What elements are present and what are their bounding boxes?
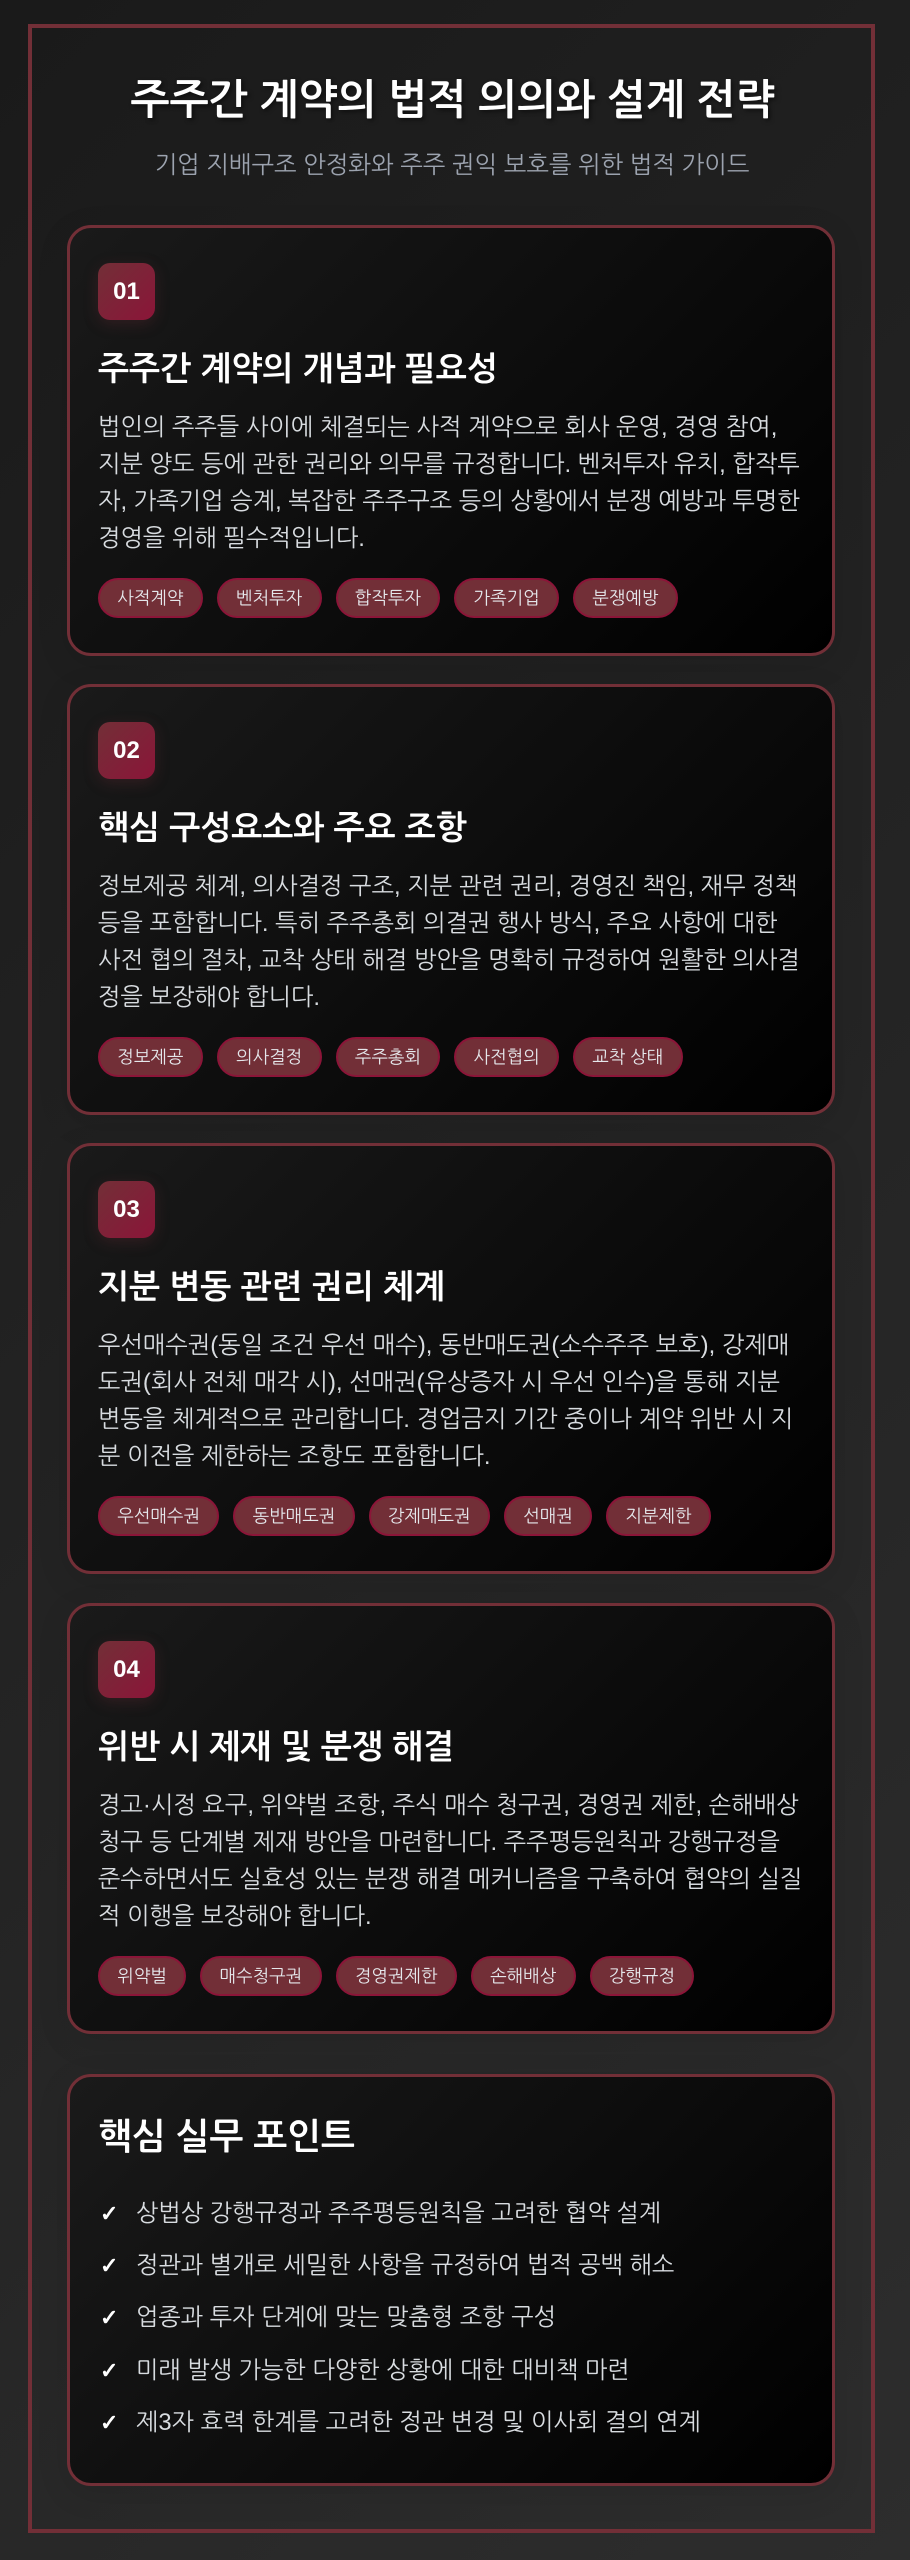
body text 04: 준수하면서도 실효성 있는 분쟁 해결 메커니즘을 구축하여 협약의 실질 [98, 1866, 802, 1892]
tags 03: 동반매도권 [253, 1506, 335, 1526]
badge 03: 03 [113, 1196, 140, 1223]
badge 04 [98, 1640, 155, 1698]
panel: section 02 [67, 684, 835, 1115]
point 3: ✓ [100, 2305, 118, 2330]
body text 02: 등을 포함합니다. 특히 주주총회 의결권 행사 방식, 주요 사항에 대한 [98, 910, 777, 937]
badge 01 [98, 263, 155, 320]
heading 04: 위반 시 제재 및 분쟁 해결 [98, 1728, 454, 1764]
point 1: 상법상 강행규정과 주주평등원칙을 고려한 협약 설계 [136, 2200, 661, 2227]
tags 02: 의사결정 [236, 1047, 302, 1067]
tags 04: 경영권제한 [355, 1966, 438, 1986]
body text 01: 경영을 위해 필수적입니다. [98, 525, 365, 552]
panel: section 03 [67, 1143, 835, 1574]
body text 03 [98, 1332, 793, 1470]
body text 02: 사전 협의 절차, 교착 상태 해결 방안을 명확히 규정하여 원활한 의사결 [98, 947, 800, 974]
body text 01: 자, 가족기업 승계, 복잡한 주주구조 등의 상황에서 분쟁 예방과 투명한 [98, 488, 800, 515]
tags 01: 사적계약 [117, 588, 183, 608]
badge 04: 04 [113, 1656, 140, 1682]
body text 03: 변동을 체계적으로 관리합니다. 경업금지 기간 중이나 계약 위반 시 지 [98, 1406, 793, 1433]
body text 01: 지분 양도 등에 관한 권리와 의무를 규정합니다. 벤처투자 유치, 합작투 [98, 451, 800, 478]
tags 04 [98, 1956, 694, 1996]
tags 04: 강행규정 [609, 1966, 675, 1986]
tags 04: 매수청구권 [220, 1966, 302, 1986]
tags 01: 벤처투자 [236, 588, 302, 608]
subtitle: 기업 지배구조 안정화와 주주 권익 보호를 위한 법적 가이드 [155, 152, 749, 179]
tags 02: 주주총회 [355, 1047, 421, 1067]
tags 03: 우선매수권 [117, 1506, 200, 1526]
body text 02: 정보제공 체계, 의사결정 구조, 지분 관련 권리, 경영진 책임, 재무 정책 [98, 873, 797, 900]
body text 03: 우선매수권(동일 조건 우선 매수), 동반매도권(소수주주 보호), 강제매 [98, 1332, 789, 1359]
body text 03: 도권(회사 전체 매각 시), 선매권(유상증자 시 우선 인수)을 통해 지분 [98, 1369, 780, 1396]
body text 01: 법인의 주주들 사이에 체결되는 사적 계약으로 회사 운영, 경영 참여, [98, 414, 777, 441]
body text 04 [98, 1792, 802, 1930]
point 5: ✓ [100, 2410, 118, 2435]
tags 04: 손해배상 [490, 1966, 556, 1986]
point 2: 정관과 별개로 세밀한 사항을 규정하여 법적 공백 해소 [136, 2252, 674, 2279]
title: 주주간 계약의 법적 의의와 설계 전략 [130, 76, 775, 123]
tags 01 [98, 578, 678, 618]
tags 01: 합작투자 [355, 588, 421, 608]
body text 04: 경고·시정 요구, 위약벌 조항, 주식 매수 청구권, 경영권 제한, 손해배상 [98, 1792, 799, 1818]
panel: key practical points [67, 2074, 835, 2486]
point 3: 업종과 투자 단계에 맞는 맞춤형 조항 구성 [136, 2304, 556, 2331]
badge 02 [98, 722, 155, 779]
tags 02: 정보제공 [117, 1047, 183, 1067]
body text 02: 정을 보장해야 합니다. [98, 984, 320, 1011]
tags 02: 교착 상태 [592, 1047, 663, 1067]
tags 03: 지분제한 [625, 1506, 692, 1526]
point 2: ✓ [100, 2253, 118, 2278]
tags 03: 선매권 [523, 1506, 573, 1526]
point 4: 미래 발생 가능한 다양한 상황에 대한 대비책 마련 [136, 2357, 630, 2384]
badge 03 [98, 1181, 155, 1238]
heading 01: 주주간 계약의 개념과 필요성 [98, 350, 498, 387]
body text 04: 적 이행을 보장해야 합니다. [98, 1902, 372, 1930]
tags 01: 가족기업 [474, 588, 540, 608]
point 5: 제3자 효력 한계를 고려한 정관 변경 및 이사회 결의 연계 [136, 2409, 701, 2436]
tags 01: 분쟁예방 [592, 588, 658, 608]
tags 02 [98, 1037, 683, 1077]
body text 03: 분 이전을 제한하는 조항도 포함합니다. [98, 1443, 491, 1470]
tags 02: 사전협의 [474, 1047, 540, 1067]
point 1: ✓ [100, 2201, 118, 2226]
panel: section 04 [67, 1602, 835, 2034]
body text 04: 청구 등 단계별 제재 방안을 마련합니다. 주주평등원칙과 강행규정을 [98, 1828, 780, 1856]
tags 03: 강제매도권 [388, 1506, 471, 1526]
panel: section 01 [67, 225, 835, 656]
heading 02: 핵심 구성요소와 주요 조항 [98, 809, 467, 846]
tags 03 [98, 1496, 711, 1536]
body text 02 [98, 873, 800, 1011]
point 4: ✓ [100, 2358, 118, 2383]
body text 01 [98, 414, 800, 552]
tags 04: 위약벌 [117, 1966, 167, 1986]
heading: key points: 핵심 실무 포인트 [98, 2116, 355, 2157]
badge 01: 01 [113, 278, 140, 305]
badge 02: 02 [113, 737, 140, 764]
heading 03: 지분 변동 관련 권리 체계 [98, 1268, 445, 1305]
